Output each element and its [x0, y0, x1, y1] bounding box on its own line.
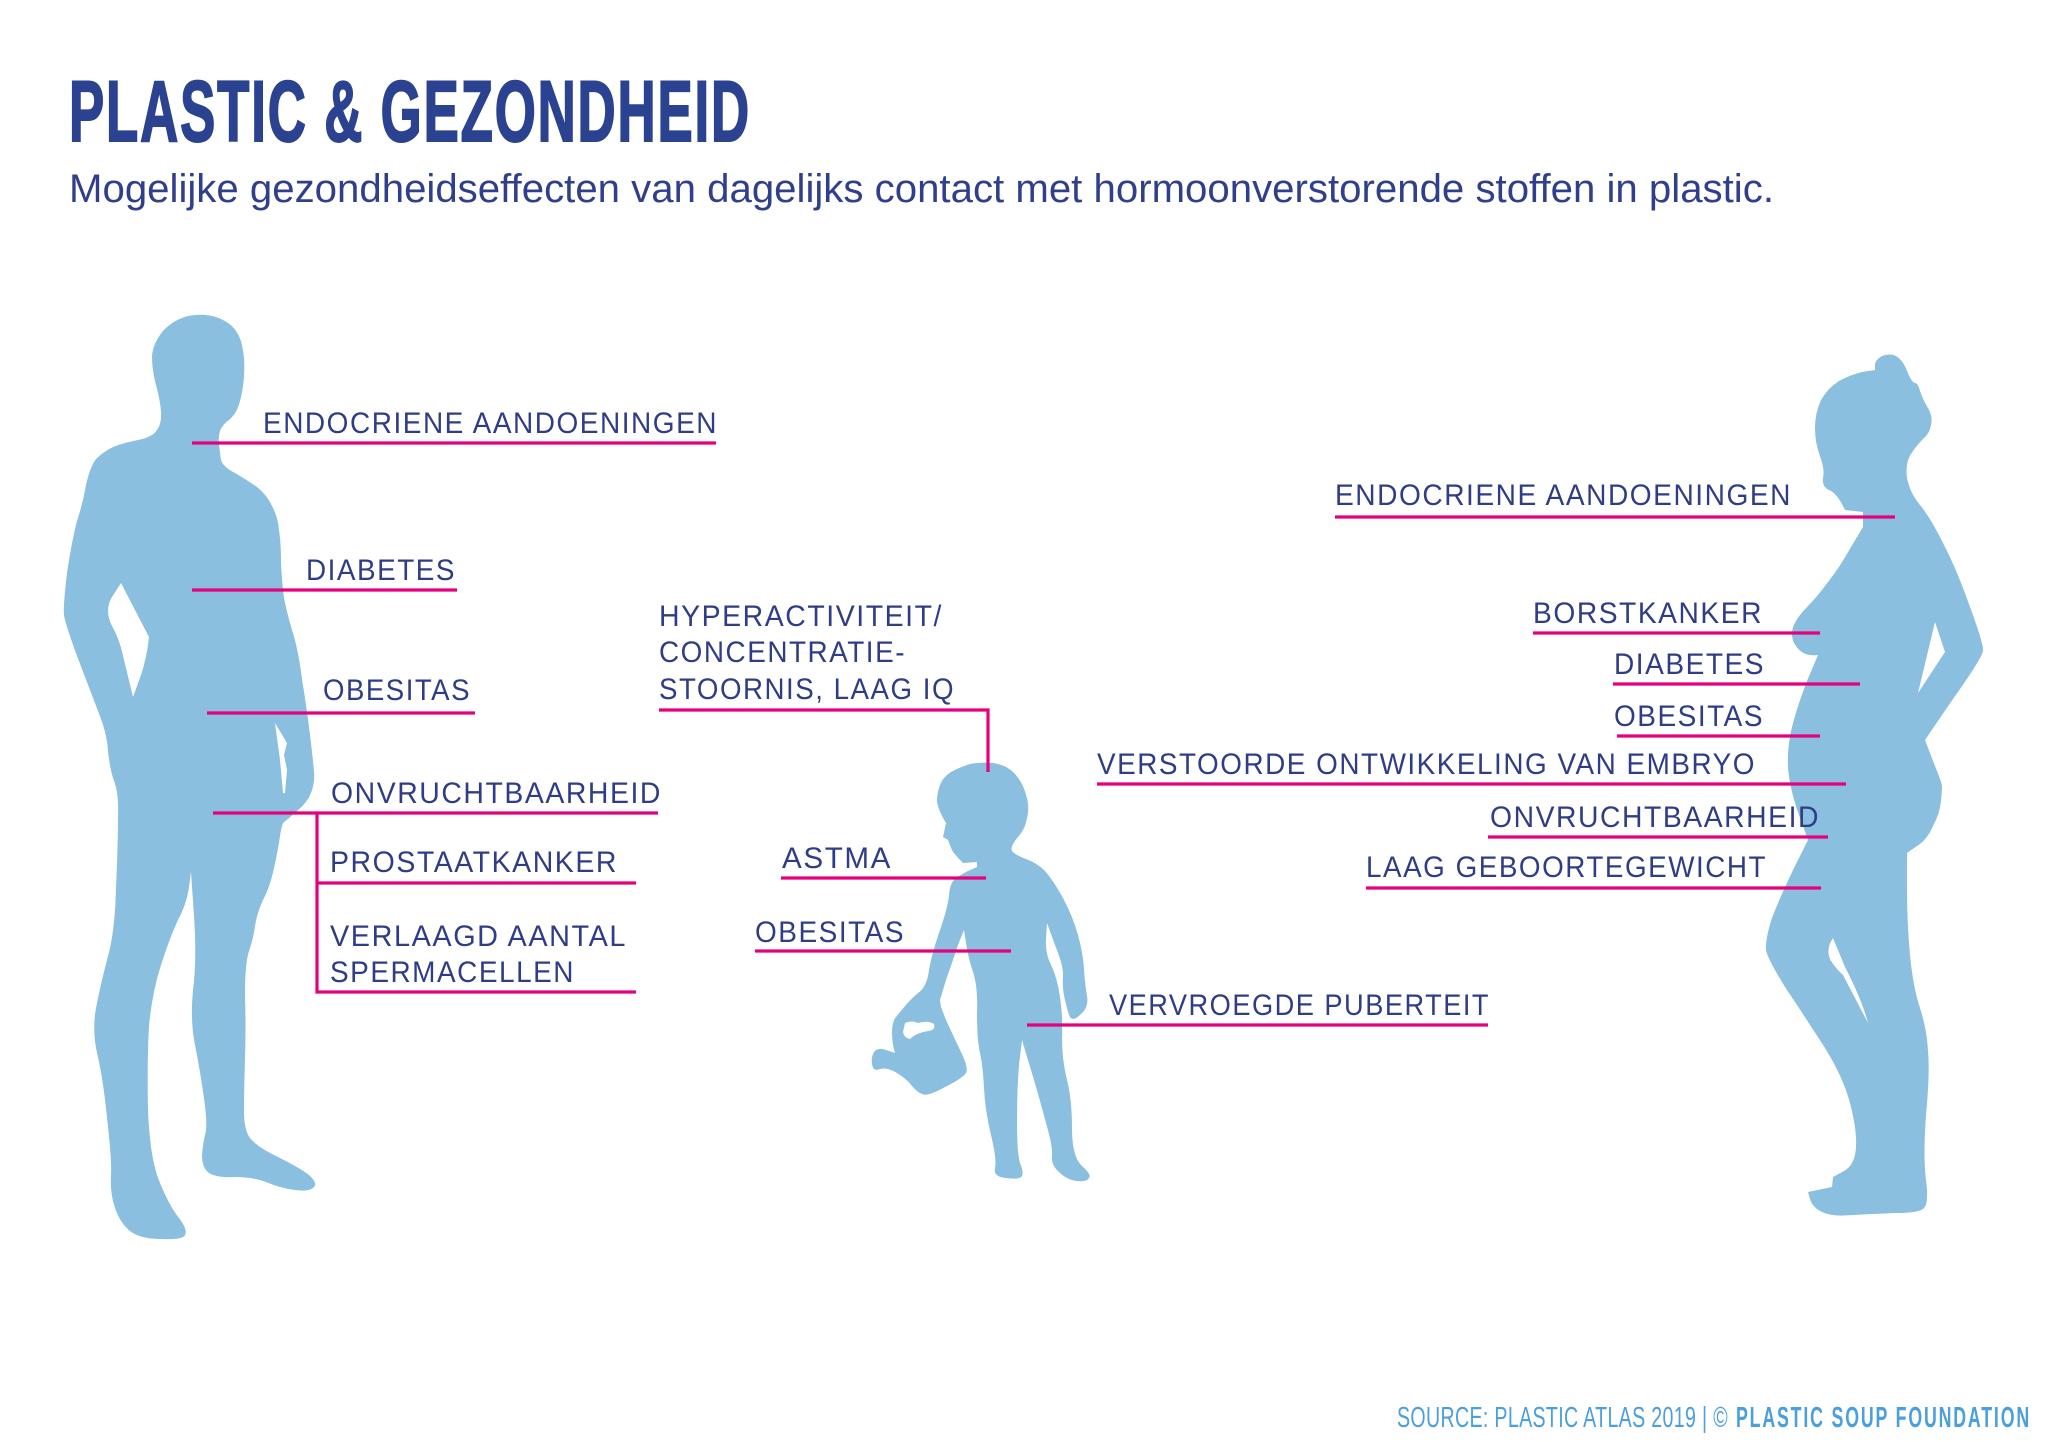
callout: child hyperactiviteit — [659, 600, 988, 772]
title: PLASTIC & GEZONDHEID — [69, 64, 751, 160]
callout: woman laag geboortegewicht: LAAG GEBOORTEGEWICHT — [1366, 851, 1767, 884]
callout: woman verstoorde ontwikkeling van embryo: VERSTOORDE ONTWIKKELING VAN EMBRYO — [1097, 748, 1756, 781]
callout: woman diabetes: DIABETES — [1614, 648, 1765, 681]
callout: man endocriene aandoeningen: ENDOCRIENE AANDOENINGEN — [263, 407, 718, 440]
callout: man verlaagd aantal spermacellen: SPERMACELLEN — [330, 956, 575, 989]
callout: woman borstkanker: BORSTKANKER — [1533, 597, 1763, 630]
callout: man verlaagd aantal spermacellen: VERLAAGD AANTAL — [330, 920, 627, 953]
callout: woman onvruchtbaarheid: ONVRUCHTBAARHEID — [1490, 801, 1820, 834]
callout: child hyperactiviteit: HYPERACTIVITEIT/ — [659, 600, 943, 633]
silhouette: child with watering can — [872, 763, 1090, 1181]
callout: man prostaatkanker: PROSTAATKANKER — [330, 846, 618, 879]
callout: child obesitas: OBESITAS — [755, 916, 905, 949]
callout: man obesitas: OBESITAS — [323, 674, 471, 707]
callout: child astma: ASTMA — [782, 842, 892, 875]
callout: man verlaagd aantal spermacellen — [317, 813, 636, 992]
silhouette: pregnant woman — [1766, 354, 1983, 1216]
silhouette: man — [64, 315, 315, 1239]
callout: child hyperactiviteit: CONCENTRATIE- — [659, 636, 906, 669]
source credit: SOURCE: PLASTIC ATLAS 2019 | © — [1397, 1402, 1728, 1434]
callout: man onvruchtbaarheid: ONVRUCHTBAARHEID — [331, 777, 662, 810]
subtitle: Mogelijke gezondheidseffecten van dagelijks contact met hormoonverstorende stoffen in plastic. — [69, 167, 1774, 211]
callout: child hyperactiviteit: STOORNIS, LAAG IQ — [659, 673, 955, 706]
callout: woman obesitas: OBESITAS — [1614, 700, 1764, 733]
callout: woman endocriene aandoeningen: ENDOCRIENE AANDOENINGEN — [1335, 479, 1792, 512]
callout: man diabetes: DIABETES — [306, 554, 456, 587]
callout: child vervroegde puberteit: VERVROEGDE PUBERTEIT — [1109, 989, 1490, 1022]
